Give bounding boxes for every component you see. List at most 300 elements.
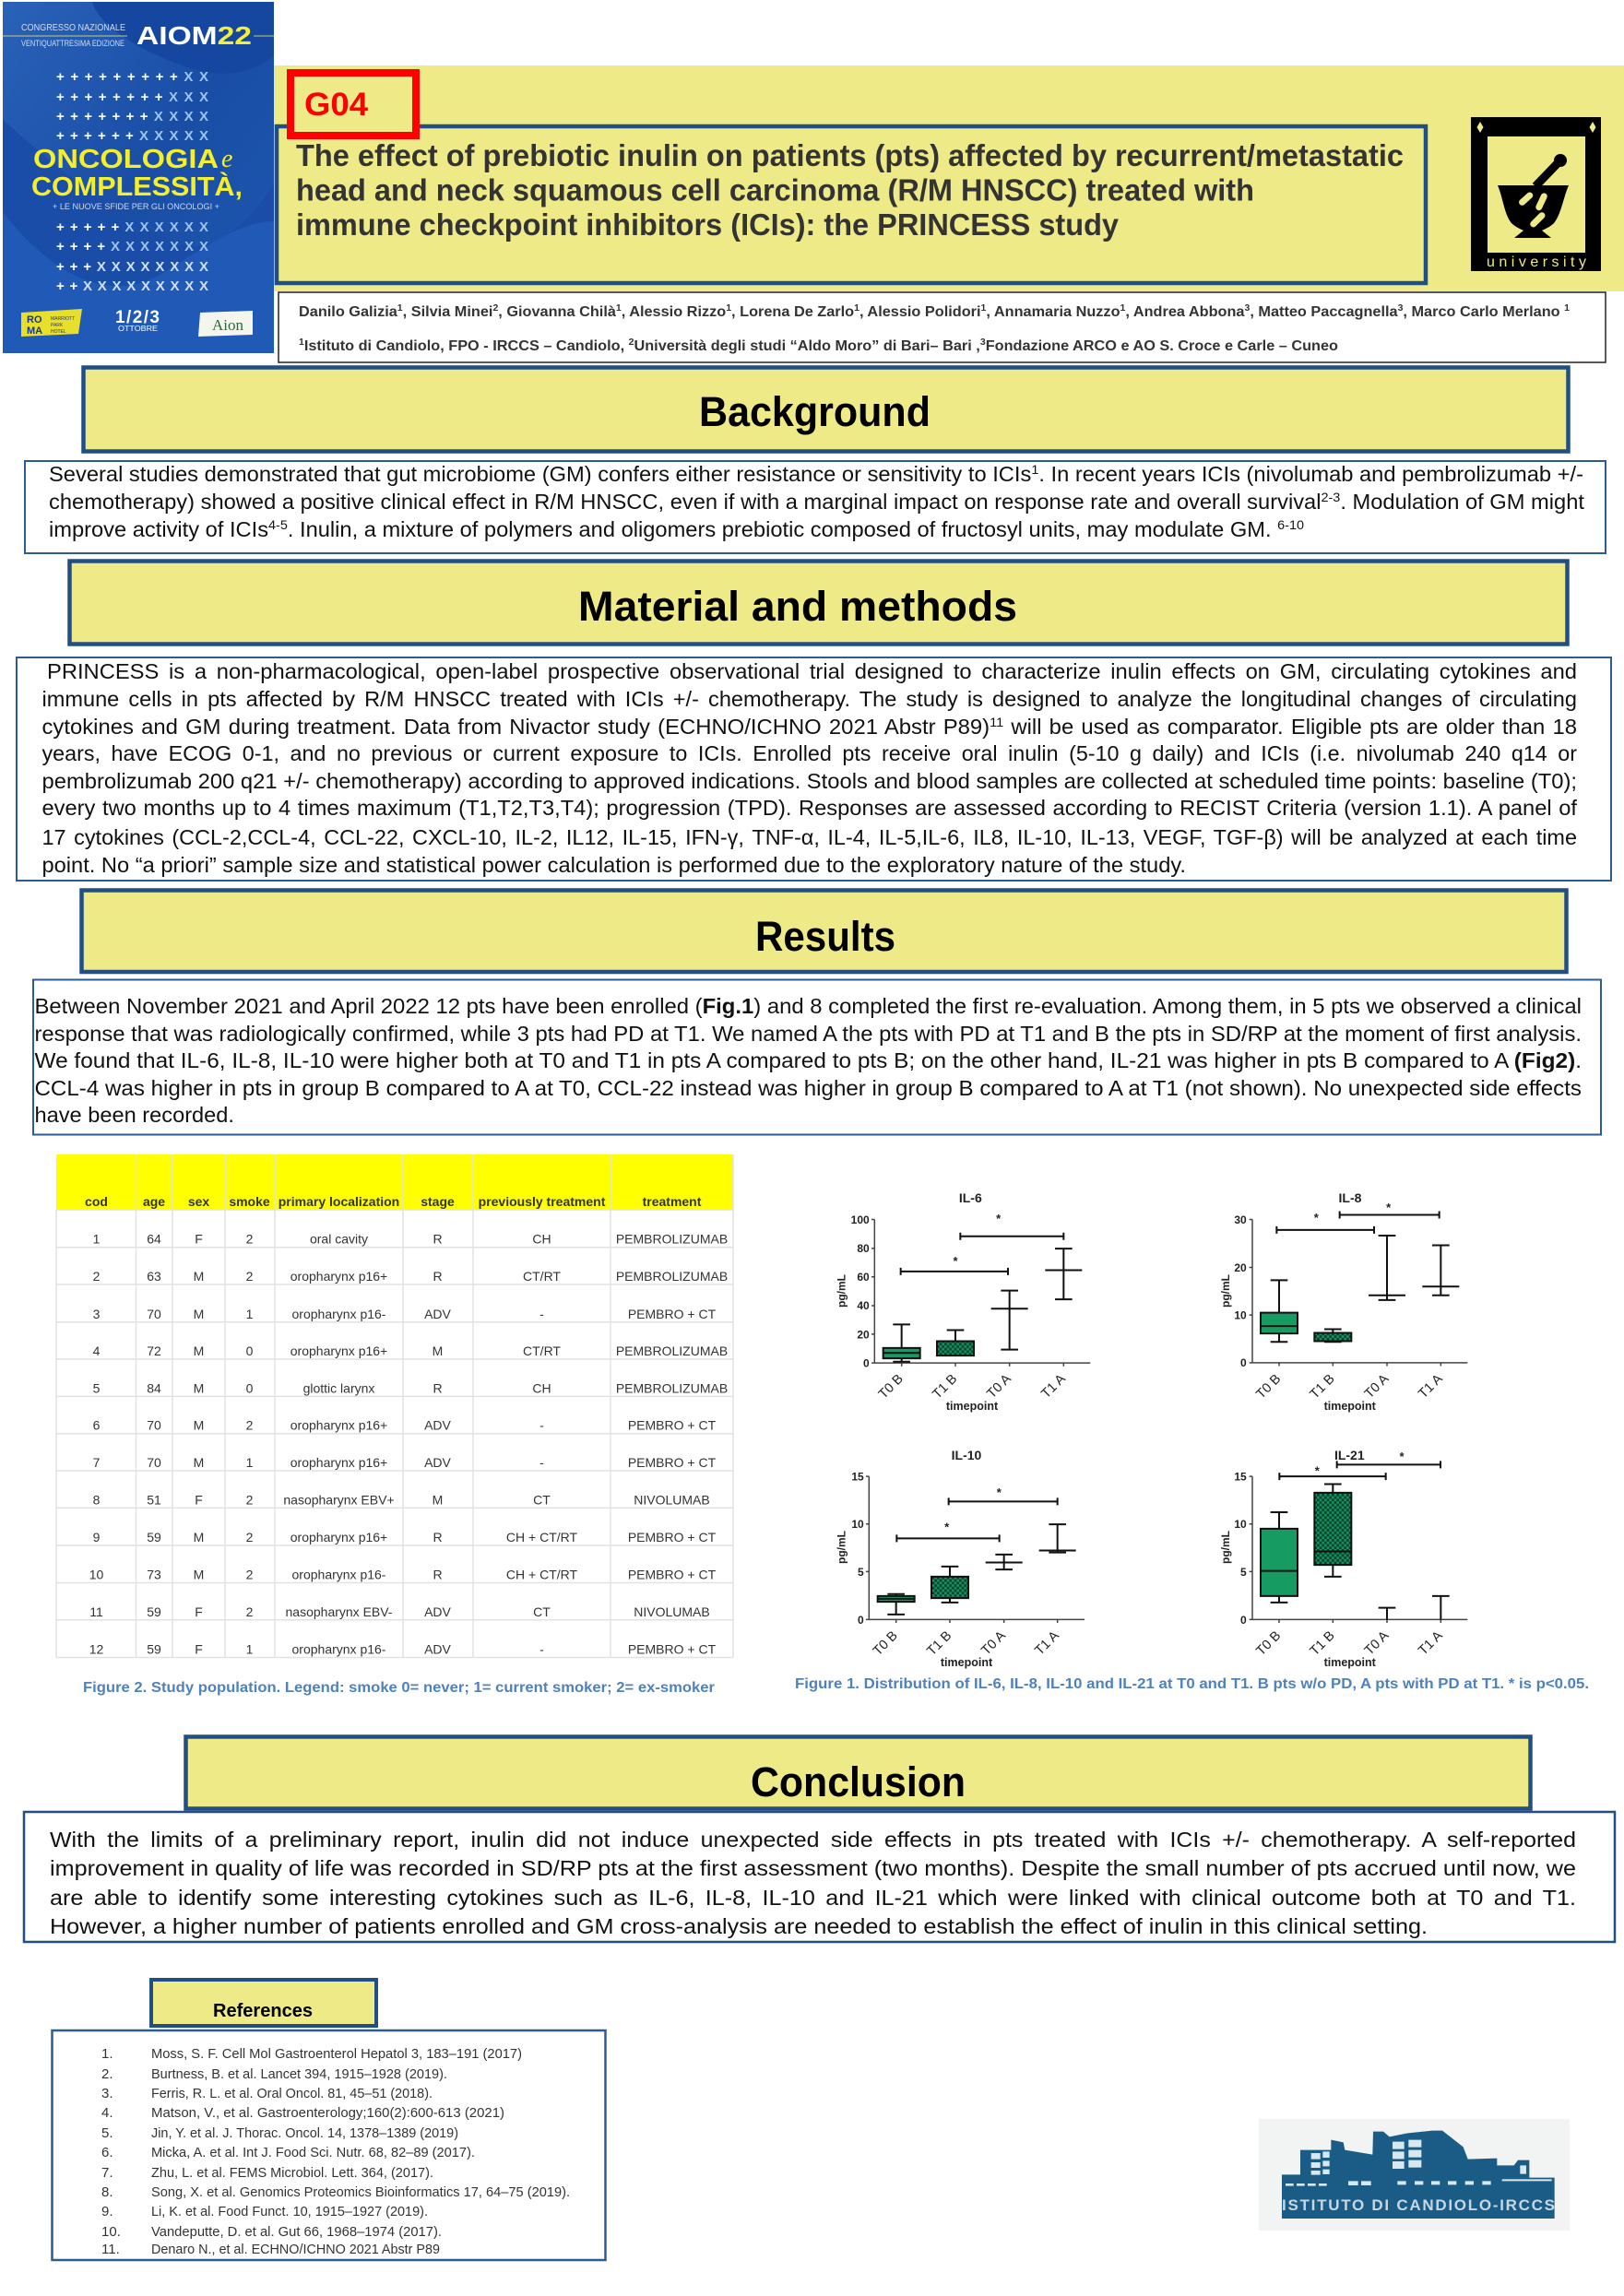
panel: conclusion text [24,1812,1615,1942]
panel: methods text [17,657,1611,881]
table row 12: 1 [246,1641,254,1656]
panel: references list: 7. [101,2165,113,2181]
panel: conclusion text: improvement in quality of life was recorded in SD/RP pts at the first assessment (two months). Despite the small number of pts accrued until now, we [50,1856,1576,1880]
chart: IL-21 box plot: 10 [1234,1518,1247,1531]
table row 9 [93,1530,717,1544]
chart: IL-21 box plot: T0 A [1362,1628,1393,1658]
panel: methods text: years, have ECOG 0-1, and no previous or current exposure to ICIs. Enrolled pts receive oral inulin (5-10 g daily) and ICIs (i.e. nivolumab 240 q14 or [42,741,1577,765]
panel: results text [33,979,1601,1134]
caption: figure 1: Figure 1. Distribution of IL-6, IL-8, IL-10 and IL-21 at T0 and T1. B pts w/o PD, A pts with PD at T1. * is p<0.05. [795,1676,1589,1692]
chart: IL-8 box plot: 30 [1234,1213,1247,1226]
chart: IL-10 box plot: * [944,1520,950,1534]
table row 6: M [194,1418,204,1433]
panel: background text: chemotherapy) showed a positive clinical effect in R/M HNSCC, even if with a marginal impact on response rate and overall survival [49,490,1284,514]
panel: results text: CCL-4 was higher in pts in group B compared to A at T0, CCL-22 instead was higher in group B compared to A at T1 (not shown). No unexpected side effects [35,1076,1582,1100]
table row 2: 2 [93,1269,101,1284]
society badge: Aion [212,316,243,334]
table row 7: ADV [424,1455,452,1470]
panel: references list [52,2030,605,2260]
table row 7: 70 [147,1455,161,1470]
table header row: treatment [643,1194,702,1209]
table row 7: PEMBRO + CT [628,1455,717,1470]
chart: IL-6 box plot: * [996,1212,1002,1225]
chart: IL-8 box plot: pg/mL [1219,1274,1232,1308]
chart: IL-21 box plot: 5 [1240,1566,1247,1579]
table row 4: M [433,1343,443,1358]
table row 8: NIVOLUMAB [634,1492,710,1507]
chart: IL-10 box plot: IL-10 [952,1448,982,1462]
table row 9: 2 [246,1530,254,1544]
panel: background text: 6-10 [1277,517,1304,532]
chart: IL-6 box plot: 80 [857,1242,870,1255]
table row 1 [93,1232,728,1247]
event dates: 1/2/3 [115,308,160,327]
heading: Background: Background [699,388,931,435]
panel: references list: Burtness, B. et al. Lancet 394, 1915–1928 (2019). [151,2066,447,2082]
panel: background text: . Modulation of GM might [1340,490,1585,514]
table row 8: nasopharynx EBV+ [283,1492,395,1507]
panel: results text: Between November 2021 and April 2022 12 pts have been enrolled ( Fig.1) and 8 completed the first re-evaluation. Among them, in 5 pts we observed a clinical [35,994,1582,1018]
authors and affiliations box: 1 [616,303,622,314]
table row 5: glottic larynx [303,1380,374,1395]
table row 3: 3 [93,1307,101,1321]
panel: methods text: point. No “a priori” sample size and statistical power calculation is performed due to the exploratory nature of the study. [42,853,1186,877]
table row 9: oropharynx p16+ [290,1530,387,1544]
table row 4: PEMBROLIZUMAB [616,1343,728,1358]
panel: references list: 2. [101,2066,113,2082]
panel: references list: 8. [101,2184,113,2200]
chart: IL-10 box plot: T1 A [1032,1628,1062,1658]
table row 11: 11 [89,1604,103,1619]
table row 3: ADV [424,1307,452,1321]
chart: IL-21 box plot: IL-21 [1334,1448,1365,1462]
chart: IL-21 box plot: timepoint [1324,1656,1377,1669]
table row 11 [89,1604,710,1619]
panel: references list: Jin, Y. et al. J. Thorac. Oncol. 14, 1378–1389 (2019) [151,2125,458,2141]
chart: IL-6 box plot: 60 [857,1271,870,1284]
chart: IL-10 box plot: timepoint [941,1656,993,1669]
panel: background text: 2-3 [1321,490,1341,504]
conference cover image: AIOM22 [3,2,274,353]
table row 10: oropharynx p16- [292,1568,386,1582]
table row 6: 2 [246,1418,254,1433]
table row 1: CH [532,1232,551,1247]
panel: references list: 10. [101,2224,121,2240]
table row 12: PEMBRO + CT [628,1641,717,1656]
table row 2: PEMBROLIZUMAB [616,1269,728,1284]
authors and affiliations box: , Lorena De Zarlo [731,304,854,320]
chart: IL-8 box plot: timepoint [1324,1400,1377,1413]
table row 5: R [433,1380,443,1395]
table row 4: 0 [246,1343,254,1358]
panel: references list: Zhu, L. et al. FEMS Microbiol. Lett. 364, (2017). [151,2165,433,2181]
table row 10: CH + CT/RT [506,1568,578,1582]
plus and cross rows, lower [56,219,208,294]
table row 2 [93,1269,728,1284]
table row 6: - [539,1418,544,1433]
plus and cross rows, upper: ++++++++ XXX [56,89,208,105]
table row 5: CH [532,1380,551,1395]
chart: IL-6 box plot: 100 [851,1213,870,1226]
chart: IL-21 box plot: T0 B [1253,1628,1284,1659]
chart: IL-8 box plot [1219,1190,1467,1413]
AIOM22 logotype: AIOM 22 [136,21,252,50]
table row 10 [89,1568,717,1582]
table row 4: CT/RT [523,1343,561,1358]
chart: IL-21 box plot: T1 B [1308,1628,1338,1659]
table row 8: M [433,1492,443,1507]
chart: IL-6 box plot: 20 [857,1328,870,1341]
logo: Istituto di Candiolo IRCCS [1259,2119,1570,2231]
chart: IL-8 box plot: * [1314,1211,1320,1225]
panel: background text [25,461,1606,553]
table header row: age [143,1194,165,1209]
table row 6: oropharynx p16+ [290,1418,387,1433]
heading: Conclusion [186,1737,1531,1809]
panel: methods text: immune cells in pts affected by R/M HNSCC treated with ICIs +/- chemotherapy. The study is designed to analyze the longitudinal changes of circulating [42,687,1577,711]
authors and affiliations box: Università degli studi “Aldo Moro” di Bari– Bari , [634,338,980,354]
chart: IL-8 box plot: 0 [1240,1356,1247,1369]
table row 12: oropharynx p16- [292,1641,386,1656]
heading: Background [83,367,1568,452]
table row 1: R [433,1232,443,1247]
table row 3: 1 [246,1307,254,1321]
congress label: VENTIQUATTRESIMA EDIZIONE [21,39,124,48]
table row 9: 59 [147,1530,161,1544]
authors and affiliations box: 3 [1398,303,1404,314]
table row 4: 4 [93,1343,101,1358]
chart: IL-6 box plot: timepoint [946,1400,999,1413]
table row 10: 2 [246,1568,254,1582]
table row 3 [93,1307,717,1321]
heading: Results [81,891,1566,972]
table row 11: 59 [147,1604,161,1619]
chart: IL-6 box plot: T0 A [984,1371,1014,1402]
plus and cross rows, upper: +++++++++ XX [56,69,208,85]
title box: immune checkpoint inhibitors (ICIs): the PRINCESS study [296,208,1119,243]
table row 8: F [195,1492,203,1507]
panel: background text: . Inulin, a mixture of polymers and oligomers prebiotic composed of fructosyl units, may modulate GM. [288,517,1277,541]
authors and affiliations box: , Andrea Abbona [1125,304,1245,320]
title box [277,126,1426,283]
panel: references list: 11. [101,2242,120,2257]
event headline: e [221,145,232,173]
heading: References: References [213,2001,313,2021]
table row 9: 9 [93,1530,101,1544]
panel: references list: 1. [101,2046,113,2062]
table row 9: CH + CT/RT [506,1530,578,1544]
chart: IL-10 box plot: 15 [851,1470,864,1483]
heading: References [151,1980,376,2026]
event headline: ONCOLOGIA [33,145,219,174]
authors and affiliations box: 1 [854,303,859,314]
panel: results text: response that was radiologically confirmed, while 3 pts had PD at T1. We named A the pts with PD at T1 and B the pts in SD/RP at the moment of first analysis. [35,1022,1582,1046]
chart: IL-21 box plot: 15 [1234,1470,1247,1483]
title box: The effect of prebiotic inulin on patients (pts) affected by recurrent/metastatic [296,139,1404,173]
chart: IL-10 box plot: 10 [851,1518,864,1531]
table header row: smoke [229,1194,270,1209]
table row 10: M [194,1568,204,1582]
table row 7: M [194,1455,204,1470]
chart: IL-21 box plot: pg/mL [1219,1531,1232,1564]
table row 5: 0 [246,1380,254,1395]
table row 6: ADV [424,1418,452,1433]
chart: IL-21 box plot: 0 [1240,1614,1247,1627]
table row 11: CT [533,1604,551,1619]
panel: background text: . In recent years ICIs (nivolumab and pembrolizumab +/- [1038,462,1583,486]
chart: IL-10 box plot: T1 B [924,1628,954,1659]
table row 11: 2 [246,1604,254,1619]
icon: university mortar and pestle logo [1471,117,1601,271]
chart: IL-6 box plot: * [953,1254,958,1268]
panel: methods text: pembrolizumab 200 q21 +/- chemotherapy) according to approved indications. Stools and blood samples are collected at scheduled time points: baseline (T0); [42,769,1577,793]
plus and cross rows, upper [56,69,208,144]
table row 9: PEMBRO + CT [628,1530,717,1544]
table row 2: CT/RT [523,1269,561,1284]
table row 3: oropharynx p16- [292,1307,386,1321]
panel: references list: Denaro N., et al. ECHNO/ICHNO 2021 Abstr P89 [151,2242,440,2257]
panel: references list: Vandeputte, D. et al. Gut 66, 1968–1974 (2017). [151,2224,442,2240]
panel: conclusion text: With the limits of a preliminary report, inulin did not induce unexpected side effects in pts treated with ICIs +/- chemotherapy. A self-reported [50,1828,1576,1852]
chart: IL-21 box plot: * [1399,1450,1405,1463]
table row 10: 73 [147,1568,161,1582]
table header row: previously treatment [479,1194,606,1209]
panel: references list: Micka, A. et al. Int J. Food Sci. Nutr. 68, 82–89 (2017). [151,2145,475,2160]
heading: Material and methods: Material and methods [578,583,1017,630]
chart: IL-8 box plot: * [1386,1201,1392,1214]
table row 12: - [539,1641,544,1656]
plus and cross rows, upper: +++++++ XXXX [56,109,208,124]
event headline: COMPLESSITÀ, [31,171,243,202]
table row 1: oral cavity [310,1232,368,1247]
table row 11: F [195,1604,203,1619]
abstract code badge G04 [290,73,416,136]
authors and affiliations box: 1 [1564,303,1570,314]
table row 8: 2 [246,1492,254,1507]
chart: IL-6 box plot: pg/mL [836,1274,848,1308]
table header row: sex [188,1194,209,1209]
authors and affiliations box: , Giovanna Chilà [498,304,616,320]
heading: Material and methods [70,561,1568,644]
chart: IL-6 box plot: T1 A [1038,1371,1069,1402]
table row 10: R [433,1568,443,1582]
authors and affiliations box: Danilo Galizia [299,304,393,320]
authors and affiliations box: 1 [397,303,403,314]
table row 2: 2 [246,1269,254,1284]
table row 10: 10 [89,1568,103,1582]
authors and affiliations box: , Annamaria Nuzzo [986,304,1120,320]
panel: methods text: PRINCESS is a non-pharmacological, open-label prospective observational trial designed to characterize inulin effects on GM, circulating cytokines and [47,659,1577,683]
authors and affiliations box: 1 [726,303,732,314]
chart: IL-8 box plot: 10 [1234,1309,1247,1322]
panel: references list: 9. [101,2204,113,2219]
panel: references list: Ferris, R. L. et al. Oral Oncol. 81, 45–51 (2018). [151,2086,433,2101]
table row 7: 1 [246,1455,254,1470]
panel: references list: Li, K. et al. Food Funct. 10, 1915–1927 (2019). [151,2204,428,2219]
authors and affiliations box: , Matteo Paccagnella [1250,304,1398,320]
table row 4 [93,1343,728,1358]
chart: IL-6 box plot: 40 [857,1299,870,1312]
congress label: CONGRESSO NAZIONALE [21,23,125,33]
table header row: stage [421,1194,455,1209]
table row 10: PEMBRO + CT [628,1568,717,1582]
table row 5: 5 [93,1380,101,1395]
table row 12: 12 [89,1641,103,1656]
event dates: OTTOBRE [118,324,158,333]
venue tag [21,309,82,337]
logo: Istituto di Candiolo IRCCS: ISTITUTO DI CANDIOLO-IRCCS [1282,2196,1555,2214]
authors and affiliations box [279,292,1606,362]
panel: references list: 3. [101,2086,113,2101]
authors and affiliations box: 3 [980,337,986,348]
chart: IL-21 box plot [1219,1448,1467,1669]
table row 7: - [539,1455,544,1470]
event headline [32,149,241,199]
table row 7: 7 [93,1455,101,1470]
authors and affiliations box: 1 [981,303,987,314]
table row 2: oropharynx p16+ [290,1269,387,1284]
table row 6: 6 [93,1418,101,1433]
heading: Results: Results [755,913,895,960]
table header row: cod [85,1194,108,1209]
panel: background text: improve activity of ICIs [49,517,262,541]
table header row [85,1194,702,1209]
chart: IL-8 box plot: T0 B [1253,1372,1284,1402]
table row 1: 1 [93,1232,101,1247]
table row 5 [93,1380,728,1395]
venue tag: MA [27,325,42,337]
panel: results text: We found that IL-6, IL-8, IL-10 were higher both at T0 and T1 in pts A compared to pts B; on the other hand, IL-21 was higher in pts B compared to A (Fig2). [35,1048,1582,1072]
table row 3: - [539,1307,544,1321]
table row 8 [93,1492,710,1507]
panel: results text: have been recorded. [35,1103,234,1127]
table row 3: 70 [147,1307,161,1321]
table row 7 [93,1455,717,1470]
table row 2: R [433,1269,443,1284]
table header row: primary localization [279,1194,399,1209]
panel: references list: 4. [101,2105,113,2121]
panel: methods text: every two months up to 4 times maximum (T1,T2,T3,T4); progression (TPD). Responses are assessed according to RECIST Criteria (version 1.1). A panel of [42,796,1578,820]
table row 6: 70 [147,1418,161,1433]
plus and cross rows, lower: +++++ XXXXXX [56,219,208,235]
authors and affiliations box: , Marco Carlo Merlano [1403,304,1564,320]
authors and affiliations box: Istituto di Candiolo, FPO - IRCCS – Candiolo, [304,338,629,354]
panel: references list: Song, X. et al. Genomics Proteomics Bioinformatics 17, 64–75 (2019). [151,2184,570,2200]
table row 6: PEMBRO + CT [628,1418,717,1433]
event subtitle: + LE NUOVE SFIDE PER GLI ONCOLOGI + [53,202,219,212]
table row 12: ADV [424,1641,452,1656]
table: study population [56,1154,733,1658]
authors and affiliations box: , Alessio Polidori [859,304,981,320]
heading: Conclusion: Conclusion [751,1758,966,1805]
table row 12 [89,1641,717,1656]
chart: IL-6 box plot: T0 B [876,1372,907,1402]
panel: background text: Several studies demonstrated that gut microbiome (GM) confers either resistance or sensitivity to ICIs [49,462,1002,486]
chart: IL-6 box plot: 0 [863,1357,870,1370]
table row 3: PEMBRO + CT [628,1307,717,1321]
panel: conclusion text: However, a higher number of patients enrolled and GM cross-analysis are needed to establish the effect of inulin in this clinical setting. [50,1914,1428,1938]
table row 12: F [195,1641,203,1656]
table row 12: 59 [147,1641,161,1656]
chart: IL-8 box plot: T1 A [1416,1371,1446,1402]
venue tag: MARRIOTT [51,316,75,322]
table row 11: ADV [424,1604,452,1619]
table row 2: 63 [147,1269,161,1284]
chart: IL-6 box plot [836,1190,1090,1413]
plus and cross rows, lower: +++ XXXXXXXX [56,259,208,275]
chart: IL-8 box plot: IL-8 [1339,1190,1362,1205]
chart: IL-10 box plot [836,1448,1085,1669]
plus and cross rows, lower: ++++ XXXXXXX [56,239,208,254]
panel: background text: 1 [1031,462,1039,477]
authors and affiliations box: Fondazione ARCO e AO S. Croce e Carle – Cuneo [986,338,1338,354]
title box: head and neck squamous cell carcinoma (R/M HNSCC) treated with [296,173,1254,208]
panel: references list: Moss, S. F. Cell Mol Gastroenterol Hepatol 3, 183–191 (2017) [151,2046,522,2062]
plus and cross rows, lower: ++ XXXXXXXXX [56,278,208,294]
authors and affiliations box: 2 [629,337,634,348]
table row 3: M [194,1307,204,1321]
table row 9: R [433,1530,443,1544]
chart: IL-10 box plot: 5 [858,1566,864,1579]
table row 1: F [195,1232,203,1247]
panel: conclusion text: are able to identify some interesting cytokines such as IL-6, IL-8, IL-10 and IL-21 which were linked with clinical outcome both at T0 and T1. [50,1886,1576,1910]
venue tag: HOTEL [51,329,66,335]
panel: methods text: cytokines and GM during treatment. Data from Nivactor study (ECHNO/ICHNO 2021 Abstr P89) [42,715,955,739]
authors and affiliations box: 2 [492,303,499,314]
table row 1: 2 [246,1232,254,1247]
table row 2: M [194,1269,204,1284]
chart: IL-10 box plot: * [997,1485,1002,1499]
panel: background text: 4-5 [268,517,288,532]
header band [274,65,1624,291]
chart: IL-21 box plot: T1 A [1416,1628,1446,1658]
panel: methods text: will be used as comparator. Eligible pts are older than 18 [1003,715,1577,739]
chart: IL-10 box plot: T0 B [871,1628,901,1659]
table row 5: 84 [147,1380,161,1395]
panel: methods text: 11 [990,715,1003,729]
panel: references list: 5. [101,2125,113,2141]
authors and affiliations box: , Silvia Minei [403,304,492,320]
chart: IL-8 box plot: T1 B [1308,1372,1338,1402]
table row 4: 72 [147,1343,161,1358]
congress label [21,23,125,48]
table row 7: oropharynx p16+ [290,1455,387,1470]
venue tag: RO [27,314,42,325]
authors and affiliations box: , Alessio Rizzo [622,304,726,320]
authors and affiliations box: 1 [299,337,304,348]
icon: university mortar and pestle logo: university [1487,254,1586,270]
plus and cross rows, upper: ++++++ XXXXX [56,128,208,144]
table row 4: oropharynx p16+ [290,1343,387,1358]
society badge [198,311,253,337]
chart: IL-6 box plot: T1 B [930,1372,960,1402]
table row 5: M [194,1380,204,1395]
chart: IL-21 box plot: * [1315,1464,1321,1477]
table row 4: M [194,1343,204,1358]
caption: figure 2: Figure 2. Study population. Legend: smoke 0= never; 1= current smoker; 2= ex-smoker [83,1680,715,1696]
authors and affiliations box: 3 [1245,303,1251,314]
table row 5: PEMBROLIZUMAB [616,1380,728,1395]
panel: references list: Matson, V., et al. Gastroenterology;160(2):600-613 (2021) [151,2105,504,2121]
table row 8: 51 [147,1492,161,1507]
abstract code badge G04: G04 [304,87,369,123]
chart: IL-8 box plot: 20 [1234,1261,1247,1274]
table row 1: PEMBROLIZUMAB [616,1232,728,1247]
table row 9: M [194,1530,204,1544]
table row 8: 8 [93,1492,101,1507]
chart: IL-8 box plot: T0 A [1362,1371,1393,1402]
table row 8: CT [533,1492,551,1507]
